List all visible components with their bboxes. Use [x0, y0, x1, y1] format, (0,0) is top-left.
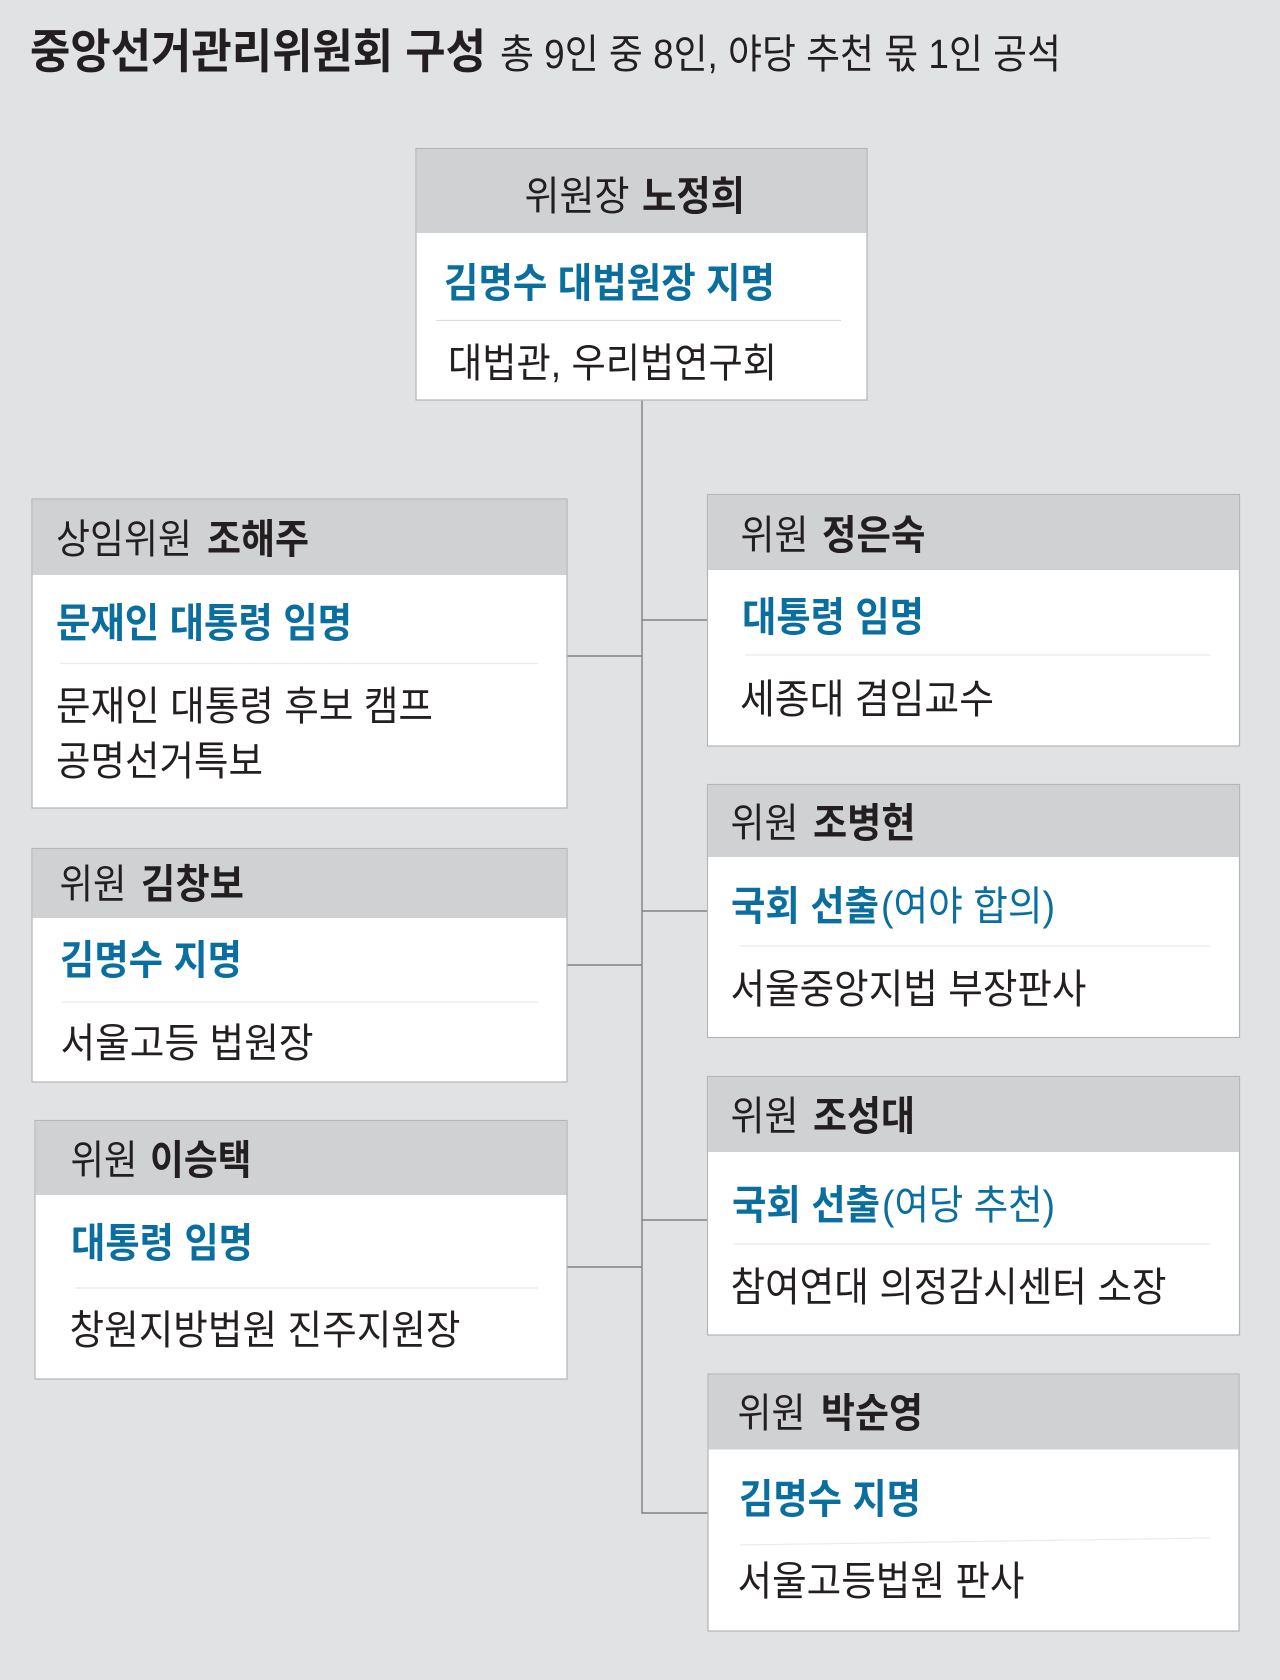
background: 창원지방법원 진주지원장 [70, 1307, 460, 1353]
member name: 이승택 [150, 1137, 252, 1183]
panel: 조성대 [708, 1076, 1240, 1335]
appointment: 대통령 임명 [71, 1220, 253, 1266]
member name: 조성대 [813, 1093, 915, 1139]
appointment: 국회 선출 [731, 883, 879, 929]
member name: 위원 [730, 800, 798, 846]
panel: 조병현 [708, 784, 1240, 1038]
member name: 위원 [60, 861, 126, 907]
background: 참여연대 의정감시센터 소장 [730, 1264, 1166, 1310]
chair appointment: 김명수 대법원장 지명 [444, 260, 775, 306]
appointment: (여당 추천) [882, 1182, 1055, 1228]
appointment: 김명수 지명 [60, 937, 242, 983]
panel: chairperson 노정희 [416, 148, 867, 400]
panel: 조해주 [32, 499, 567, 808]
member name: 상임위원 [56, 516, 192, 562]
member name: 조해주 [207, 516, 309, 562]
member name: 위원 [740, 512, 808, 558]
member name: 위원 [70, 1137, 138, 1183]
chair background: 대법관, 우리법연구회 [448, 340, 777, 386]
subtitle: 총 9인 중 8인, 야당 추천 몫 1인 공석 [500, 31, 1061, 77]
member name: 위원 [730, 1093, 798, 1139]
background: 세종대 겸임교수 [740, 676, 994, 722]
member name: 정은숙 [822, 512, 926, 558]
background: 공명선거특보 [56, 738, 263, 784]
chair name: 위원장 [524, 173, 630, 219]
member name: 위원 [738, 1390, 806, 1436]
background: 서울고등법원 판사 [738, 1558, 1024, 1604]
background: 서울고등 법원장 [60, 1020, 314, 1066]
connector lines [567, 400, 708, 1513]
member name: 조병현 [813, 800, 916, 846]
heading: 중앙선거관리위원회 구성 [30, 25, 486, 78]
panel: 박순영 [708, 1374, 1239, 1631]
panel: 김창보 [32, 848, 567, 1082]
appointment: 김명수 지명 [739, 1476, 921, 1522]
member name: 박순영 [821, 1390, 923, 1436]
chair name: 노정희 [642, 173, 745, 219]
member name: 김창보 [141, 861, 244, 907]
appointment: 문재인 대통령 임명 [56, 600, 352, 646]
appointment: 국회 선출 [732, 1182, 880, 1228]
background [56, 683, 433, 784]
background: 문재인 대통령 후보 캠프 [56, 683, 433, 729]
panel: 정은숙 [708, 494, 1240, 746]
panel: 이승택 [35, 1120, 567, 1379]
title [30, 25, 1061, 78]
appointment: (여야 합의) [881, 883, 1055, 929]
background: 서울중앙지법 부장판사 [730, 966, 1086, 1012]
appointment: 대통령 임명 [742, 594, 924, 640]
